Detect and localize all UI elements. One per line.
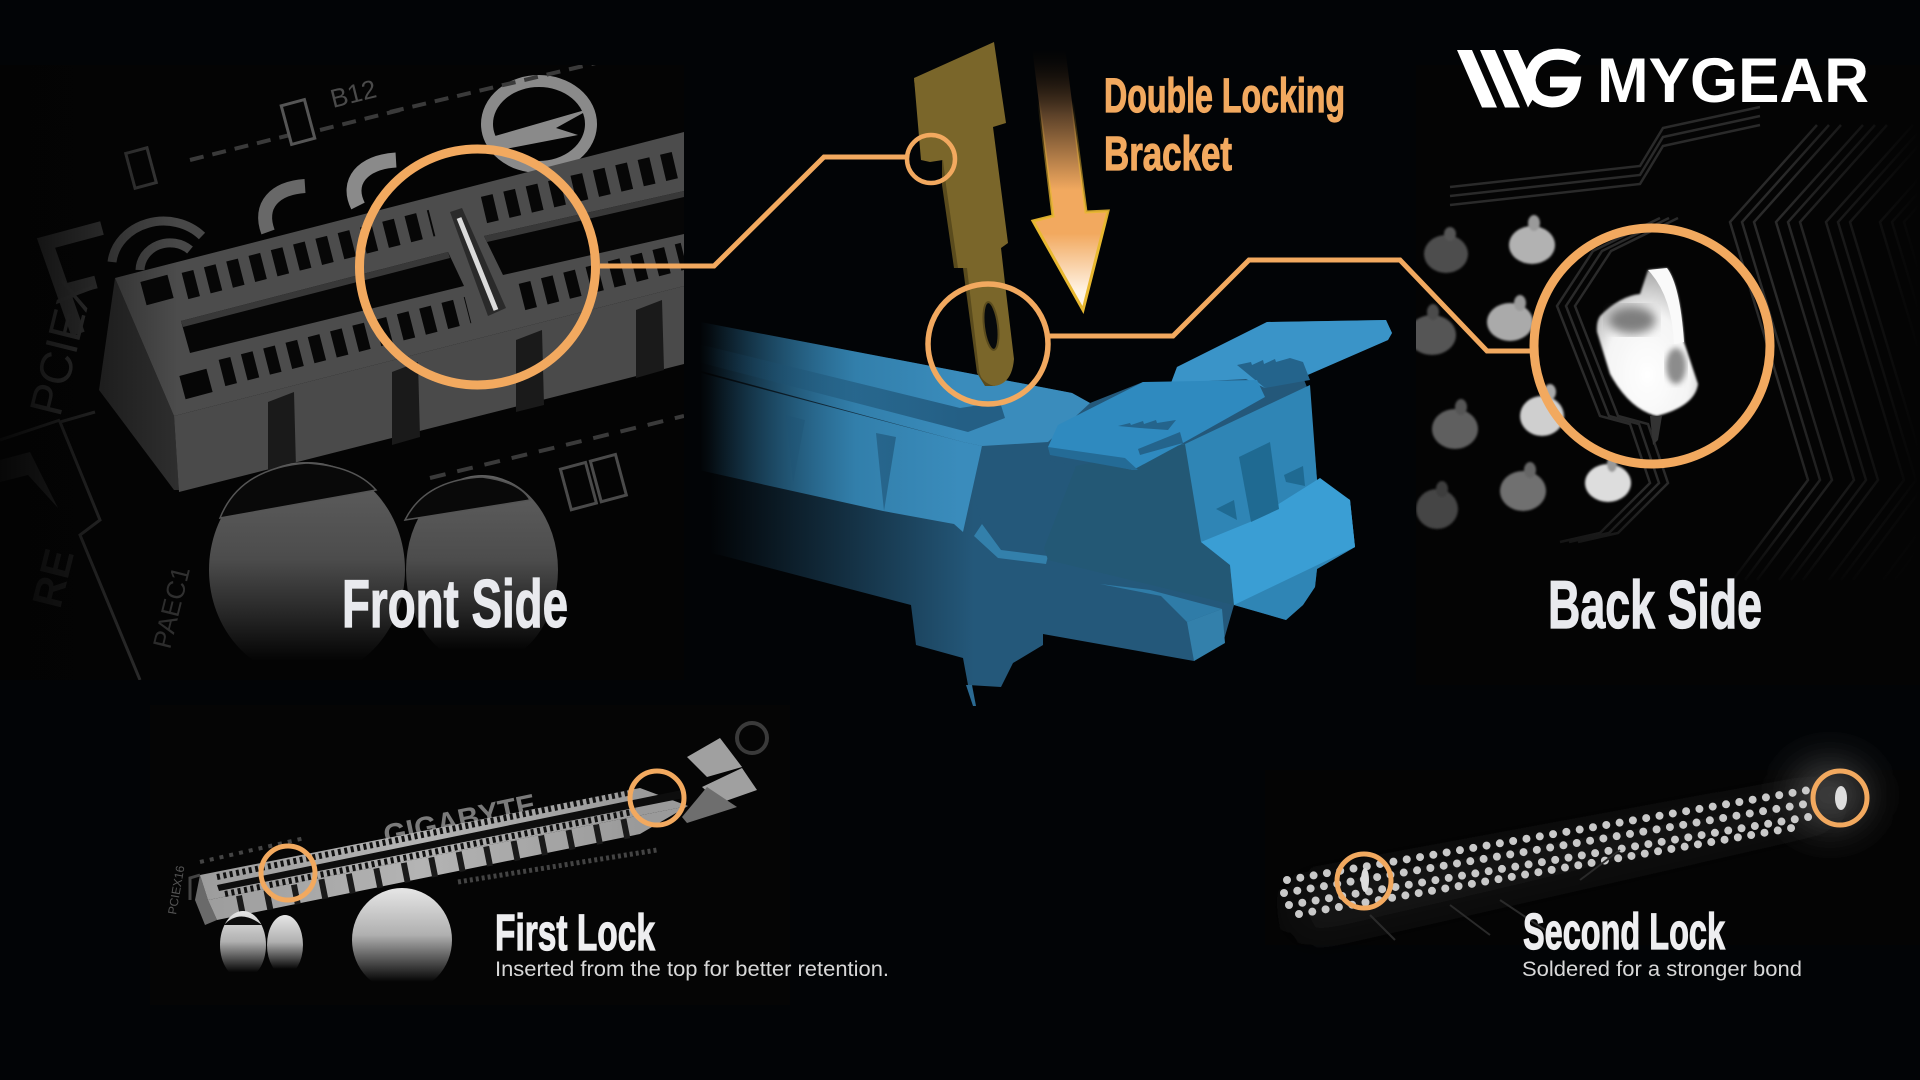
PCIe connector: top surface (115, 132, 684, 416)
circuit traces (1450, 107, 1920, 580)
arrow: insertion direction (1032, 47, 1108, 310)
label: Back Side: Back Side (1548, 567, 1762, 643)
slot top surface (200, 788, 688, 900)
back side callout circle (1534, 228, 1770, 464)
board silkscreen markings: RE (23, 544, 83, 612)
solder joint (1597, 268, 1698, 445)
front side callout circle (360, 149, 596, 385)
blue connector latch (690, 320, 1392, 706)
lock circles: first panel (261, 771, 684, 900)
fade overlay (0, 147, 154, 680)
pin slot circle (928, 284, 1048, 404)
right block side (1140, 385, 1355, 620)
PCIe connector: contact slits (185, 163, 684, 373)
bracket pin (914, 42, 1014, 386)
fan icon on board (737, 723, 767, 753)
pin side edge (914, 75, 995, 386)
rail groove (690, 342, 1005, 432)
solder pads (1408, 215, 1631, 529)
release latch (682, 738, 757, 823)
connector silhouette (690, 320, 1392, 687)
back latch teeth (1237, 358, 1310, 388)
text: First Lock: First Lock (495, 904, 655, 961)
text: Second Lock (1522, 903, 1802, 981)
bright ledge (1201, 478, 1355, 605)
slot notches (238, 826, 640, 906)
pin face (914, 42, 1014, 386)
PCIe connector: left end (99, 278, 179, 490)
board silkscreen markings: PAEC1 (147, 563, 196, 651)
bottom pin (966, 685, 976, 706)
board details: PCIEX16 (165, 864, 188, 916)
latch slit (1138, 432, 1183, 455)
PCIe connector: square holes (140, 275, 213, 399)
PCIe connector: central slot (181, 191, 684, 353)
solder dots (1284, 790, 1820, 914)
heading: Double Locking Bracket: Bracket (1104, 128, 1232, 181)
pin rows (217, 792, 637, 894)
panel: back side photo (1416, 106, 1898, 574)
front latch tab (1048, 380, 1265, 470)
lower skirt facet (1187, 609, 1225, 661)
slot channel (217, 790, 684, 891)
heading: Double Locking Bracket (1104, 70, 1345, 181)
front wall (690, 370, 982, 532)
wall ribs (786, 415, 896, 511)
board silkscreen markings: B12 (327, 74, 379, 114)
locking bracket pin (450, 208, 506, 316)
callout lines and circles (360, 135, 1770, 464)
pin notch circle (907, 135, 955, 183)
board details (165, 838, 657, 916)
board silkscreen markings: PCIEX (19, 274, 103, 420)
trace fade bottom (1560, 512, 1886, 580)
panel: first lock (168, 721, 769, 980)
pin slot (981, 301, 1001, 351)
slot left end (195, 875, 217, 925)
text: First Lock (495, 904, 889, 981)
PCIe connector: front face (174, 286, 684, 492)
logo: MYGEAR (1457, 46, 1869, 116)
text: First Lock: Inserted from the top for better retention. (495, 957, 889, 981)
text: Second Lock: Soldered for a stronger bond (1522, 957, 1802, 981)
leader line: front side to pin (600, 157, 906, 266)
capacitors (220, 888, 452, 980)
centre panel (975, 446, 1076, 556)
leader line: pin slot to back side (1048, 260, 1530, 351)
lower skirt strip (1100, 584, 1222, 622)
top rail (690, 320, 1090, 446)
glow behind pins (1290, 790, 1850, 935)
slot front face (208, 806, 688, 920)
right end glow (1792, 763, 1868, 827)
lock circles: second panel (1337, 771, 1867, 908)
right block face (1044, 444, 1234, 605)
panel: front side photo (0, 62, 684, 680)
logo mark (1457, 50, 1578, 108)
board silkscreen markings (0, 62, 684, 680)
front latch teeth (1118, 420, 1176, 430)
wordmark: MYGEAR (1597, 46, 1869, 116)
brand text on board: GIGABYTE (381, 788, 539, 853)
capacitors (209, 462, 558, 650)
traces (1370, 850, 1620, 940)
text: Second Lock: Second Lock (1523, 903, 1725, 960)
back latch tab (1171, 320, 1392, 388)
heading: Double Locking Bracket: Double Locking (1104, 70, 1345, 123)
lower edge highlight (974, 524, 1048, 564)
PCIe connector: front notches (268, 300, 664, 476)
joint highlights (1361, 786, 1847, 892)
label: Front Side: Front Side (342, 566, 568, 642)
panel: second lock (1265, 763, 1920, 945)
front latch underside (1048, 447, 1138, 470)
trace fade right (1810, 124, 1920, 568)
window openings (1216, 442, 1305, 522)
